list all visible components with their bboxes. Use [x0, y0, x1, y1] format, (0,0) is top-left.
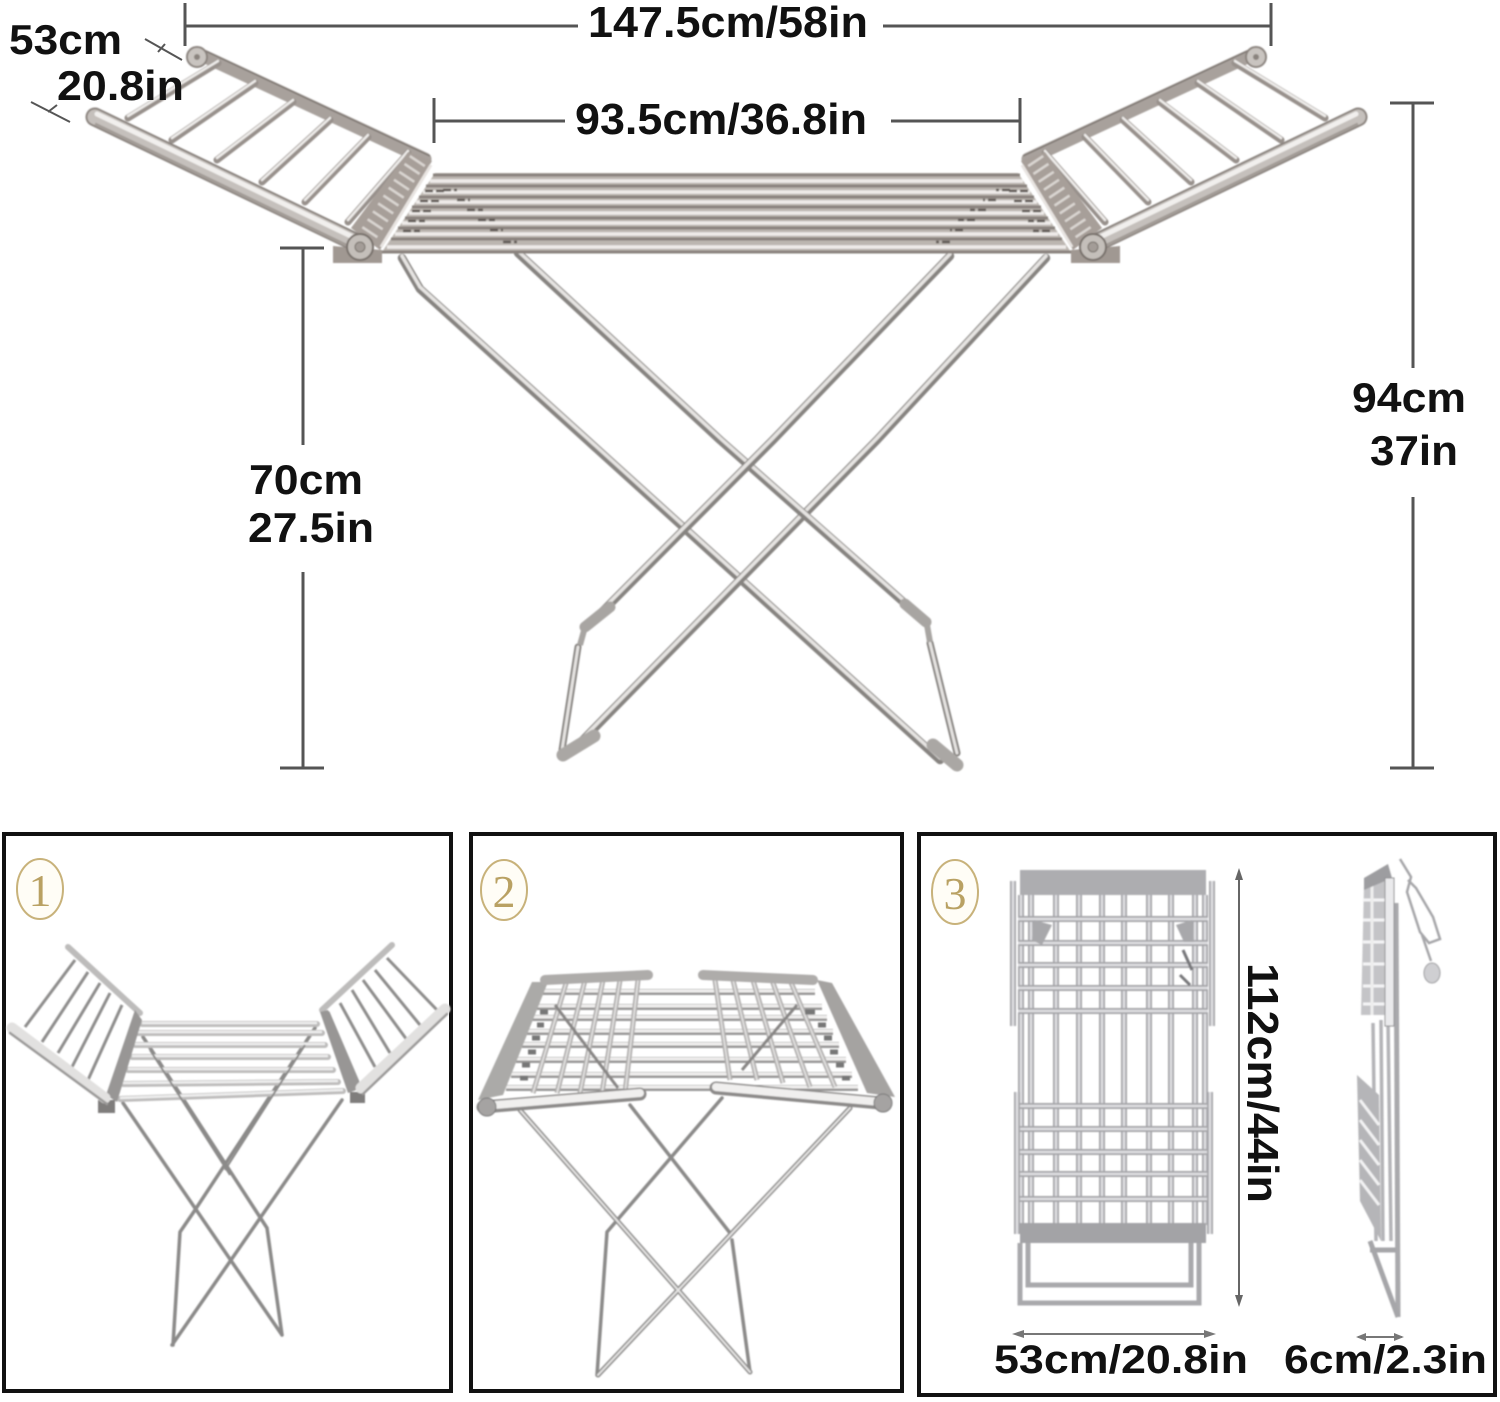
badge 1: 1: [28, 865, 52, 916]
right foot frame: [930, 643, 957, 753]
folded rack front view: [1013, 870, 1212, 1303]
main rack illustration: [95, 47, 1358, 765]
dimension: wing depth: 53cm: [9, 16, 122, 63]
dimension: wing depth: 20.8in: [57, 62, 184, 109]
dimension: wing depth: [9, 16, 184, 122]
dimension: overall width: [185, 0, 1271, 47]
dimension: total height: 94cm: [1352, 374, 1466, 421]
badge 2: [481, 860, 527, 920]
rack 1: [10, 945, 447, 1345]
panel 2: wings folded in: [471, 834, 902, 1391]
centre drying bars: [380, 173, 1073, 252]
badge 3: [932, 860, 978, 924]
dimension: leg height: 70cm: [249, 456, 363, 503]
panel 1: opened rack: [4, 834, 451, 1391]
badge 1: [17, 859, 63, 919]
badge 3: 3: [944, 868, 966, 919]
dimension: centre width: [434, 95, 1020, 144]
dimension: leg height: 27.5in: [248, 504, 374, 551]
dimension: folded depth: 6cm/2.3in: [1284, 1338, 1487, 1382]
right wing: [1021, 47, 1358, 263]
folded rack side view: [1357, 859, 1440, 1317]
dimension: folded height: [1235, 868, 1287, 1307]
rack 2: [478, 975, 895, 1375]
badge 2: 2: [492, 866, 516, 917]
dimension: leg height: [248, 248, 374, 768]
dimension: total height: 37in: [1370, 427, 1458, 474]
dimension: folded width: 53cm/20.8in: [994, 1338, 1248, 1382]
legs: [402, 251, 1046, 765]
panel 3: folded flat: [919, 834, 1495, 1395]
left foot frame: [562, 647, 578, 750]
left wing: [95, 47, 432, 263]
dimension: folded height: 112cm/44in: [1238, 963, 1287, 1203]
dimension: centre width: 93.5cm/36.8in: [575, 95, 867, 144]
power cord and plug: [1400, 859, 1440, 961]
dimension: total height: [1352, 103, 1466, 768]
